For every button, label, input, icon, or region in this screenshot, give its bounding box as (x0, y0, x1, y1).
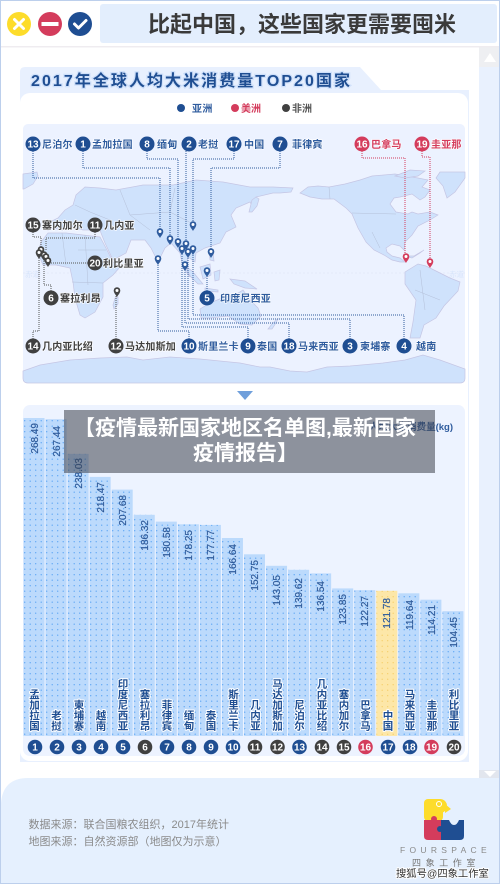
label 13 (26, 136, 73, 152)
label 16: 16 (356, 140, 368, 150)
bar values: 268.49 (30, 423, 41, 454)
label 12: 马达加斯加 (125, 340, 176, 353)
label 4: 越南 (416, 340, 436, 353)
label 1: 孟加拉国 (92, 138, 133, 151)
label 17 (226, 136, 264, 152)
label 17: 17 (228, 140, 240, 150)
label 11: 11 (90, 220, 101, 232)
bar values: 218.47 (96, 482, 107, 513)
label 4 (396, 338, 436, 354)
overlay title banner: 【疫情最新国家地区名单图,最新国家 (74, 416, 416, 440)
icon: blue check (68, 12, 92, 36)
label 12: 12 (110, 342, 122, 352)
overlay title banner (64, 410, 435, 473)
label 14 (26, 338, 93, 354)
panel: outer card (20, 67, 469, 762)
country names (28, 678, 460, 732)
data sources: 数据来源：联合国粮农组织，2017年统计 (28, 817, 229, 831)
label 14: 几内亚比绍 (42, 340, 93, 353)
equator (23, 272, 465, 274)
label 2: 2 (186, 140, 192, 150)
label 6 (44, 290, 101, 306)
data sources: 地图来源：自然资源部（地图仅为示意） (28, 834, 226, 848)
bar values: 114.21 (427, 605, 438, 635)
label 19 (414, 136, 462, 152)
map panel: 赤道 (25, 269, 40, 279)
rank badges: 9 (208, 742, 214, 754)
map panel: 赤道 (449, 269, 464, 279)
bar values: 136.54 (316, 581, 327, 612)
label 19: 圭亚那 (431, 138, 462, 151)
rank badges: 14 (316, 742, 328, 754)
label 15 (26, 218, 83, 232)
title banner: 比起中国，这些国家更需要囤米 (148, 12, 456, 37)
logo wordmark: FOURSPACE (400, 845, 491, 855)
country names: 几内亚 (249, 700, 261, 731)
bar values: 119.64 (405, 600, 416, 630)
rank badges: 12 (272, 742, 283, 754)
label 7: 7 (277, 140, 283, 150)
label 17: 中国 (244, 138, 264, 151)
label 12 (108, 338, 176, 354)
footer panel (1, 778, 499, 883)
label 2 (182, 136, 218, 152)
bar values: 152.75 (250, 560, 261, 591)
chart unit label: 人均大米消费量(kg) (369, 421, 453, 433)
label 16 (354, 136, 402, 152)
country names: 塞内加尔 (338, 688, 350, 731)
country names: 巴拿马 (359, 700, 371, 732)
header bar (1, 4, 499, 48)
country names: 马来西亚 (404, 689, 416, 731)
label 1 (76, 136, 133, 152)
chart panel (23, 405, 465, 756)
label 3 (342, 338, 391, 354)
label 11: 几内亚 (104, 219, 135, 232)
bar chart (24, 418, 463, 754)
label 11 (88, 218, 135, 232)
label 14: 14 (27, 342, 39, 352)
logo chinese name: 四象工作室 (412, 857, 480, 868)
label 5: 印度尼西亚 (220, 292, 271, 305)
world map land (23, 170, 465, 383)
connector lines (33, 151, 430, 339)
label 10: 10 (183, 342, 195, 352)
label 19: 19 (416, 140, 428, 150)
rank badges: 18 (404, 742, 416, 754)
country names: 泰国 (204, 709, 216, 732)
rank badges: 10 (227, 742, 239, 754)
rank badges: 5 (120, 742, 126, 754)
label 6: 6 (48, 294, 54, 304)
legend: 美洲 (241, 102, 261, 115)
bar values: 238.03 (74, 458, 85, 489)
logo (424, 799, 464, 840)
country names: 马达加斯加 (271, 678, 283, 732)
map panel (23, 124, 465, 383)
label 7: 菲律宾 (292, 138, 323, 151)
label 8 (140, 136, 177, 152)
rank badges: 1 (32, 742, 38, 754)
title banner (100, 4, 497, 43)
label 20 (88, 256, 144, 270)
bar values (30, 423, 460, 648)
bar values: 123.85 (338, 594, 349, 625)
icon: red minus (38, 12, 62, 36)
label 6: 塞拉利昂 (60, 292, 101, 305)
rank badges: 2 (54, 742, 60, 754)
rank badges: 7 (164, 742, 170, 754)
label 15: 15 (27, 220, 39, 232)
label 2: 老挝 (198, 138, 218, 151)
bar values: 143.05 (272, 575, 283, 606)
country names: 越南 (94, 709, 106, 732)
overlay title banner: 疫情报告】 (193, 442, 298, 465)
rank badges: 4 (98, 742, 104, 754)
bar values: 177.77 (206, 530, 217, 561)
rank badges: 13 (294, 742, 305, 754)
label 20: 20 (89, 258, 101, 270)
country names: 尼泊尔 (293, 700, 305, 731)
bar values: 207.68 (118, 495, 129, 526)
country names: 利比里亚 (448, 688, 460, 731)
country names: 柬埔寨 (72, 699, 84, 732)
rank badges: 20 (448, 742, 460, 754)
label 13: 13 (27, 140, 39, 150)
bar values: 178.25 (184, 530, 195, 561)
scrollbar track (479, 47, 499, 781)
country names: 几内亚比绍 (316, 678, 328, 732)
country names: 塞拉利昂 (138, 688, 150, 732)
icon: yellow cross (7, 12, 31, 36)
label 1: 1 (80, 140, 86, 150)
country names: 老挝 (50, 709, 62, 732)
label 3: 柬埔寨 (360, 340, 391, 353)
data sources (28, 817, 229, 848)
watermark: 搜狐号@四象工作室 (396, 867, 489, 880)
label 9: 9 (245, 342, 251, 352)
label 3: 3 (347, 342, 353, 352)
rank badges: 3 (76, 742, 82, 754)
bar values: 139.62 (294, 578, 305, 609)
rank badges: 17 (382, 742, 394, 754)
rank badges: 15 (338, 742, 350, 754)
country names: 孟加拉国 (28, 688, 40, 732)
bar values: 166.64 (228, 544, 239, 575)
label 5: 5 (204, 294, 210, 304)
label 18: 马来西亚 (298, 340, 339, 353)
legend: 亚洲 (192, 103, 213, 115)
label 13: 尼泊尔 (42, 138, 73, 151)
legend (177, 102, 312, 115)
label 10: 斯里兰卡 (198, 340, 239, 353)
map pins (36, 221, 433, 297)
bar values: 122.27 (360, 596, 371, 627)
rank badges: 11 (250, 742, 261, 754)
label 15: 塞内加尔 (42, 219, 83, 232)
label 16: 巴拿马 (371, 138, 402, 151)
bar values: 186.32 (140, 520, 151, 551)
rank badges: 19 (426, 742, 437, 754)
label 8: 8 (144, 140, 150, 150)
rank badges (28, 740, 461, 754)
bar values: 121.78 (382, 598, 393, 629)
label 9: 泰国 (257, 340, 277, 353)
bar values: 267.44 (52, 426, 63, 457)
rank badges: 16 (360, 742, 371, 754)
country names: 斯里兰卡 (227, 688, 239, 732)
rank badges: 6 (142, 742, 148, 754)
arrow: map to chart (237, 391, 253, 400)
bar values: 180.58 (162, 527, 173, 558)
country names: 缅甸 (182, 709, 194, 732)
country names: 菲律宾 (160, 699, 172, 732)
country names: 印度尼西亚 (116, 678, 128, 731)
label 10 (182, 338, 239, 354)
label 5 (200, 290, 271, 306)
section heading: 2017年全球人均大米消费量TOP20国家 (31, 71, 352, 90)
map labels (26, 136, 462, 354)
label 7 (272, 136, 323, 152)
country names: 中国 (382, 709, 394, 732)
legend: 非洲 (292, 102, 312, 115)
label 4: 4 (401, 342, 407, 352)
country names: 圭亚那 (426, 699, 438, 732)
label 18 (282, 338, 339, 354)
label 18: 18 (283, 342, 295, 352)
rank badges: 8 (186, 742, 192, 754)
label 9 (240, 338, 277, 354)
label 20: 利比里亚 (103, 257, 144, 270)
bar values: 104.45 (449, 617, 460, 648)
label 8: 缅甸 (157, 138, 177, 151)
